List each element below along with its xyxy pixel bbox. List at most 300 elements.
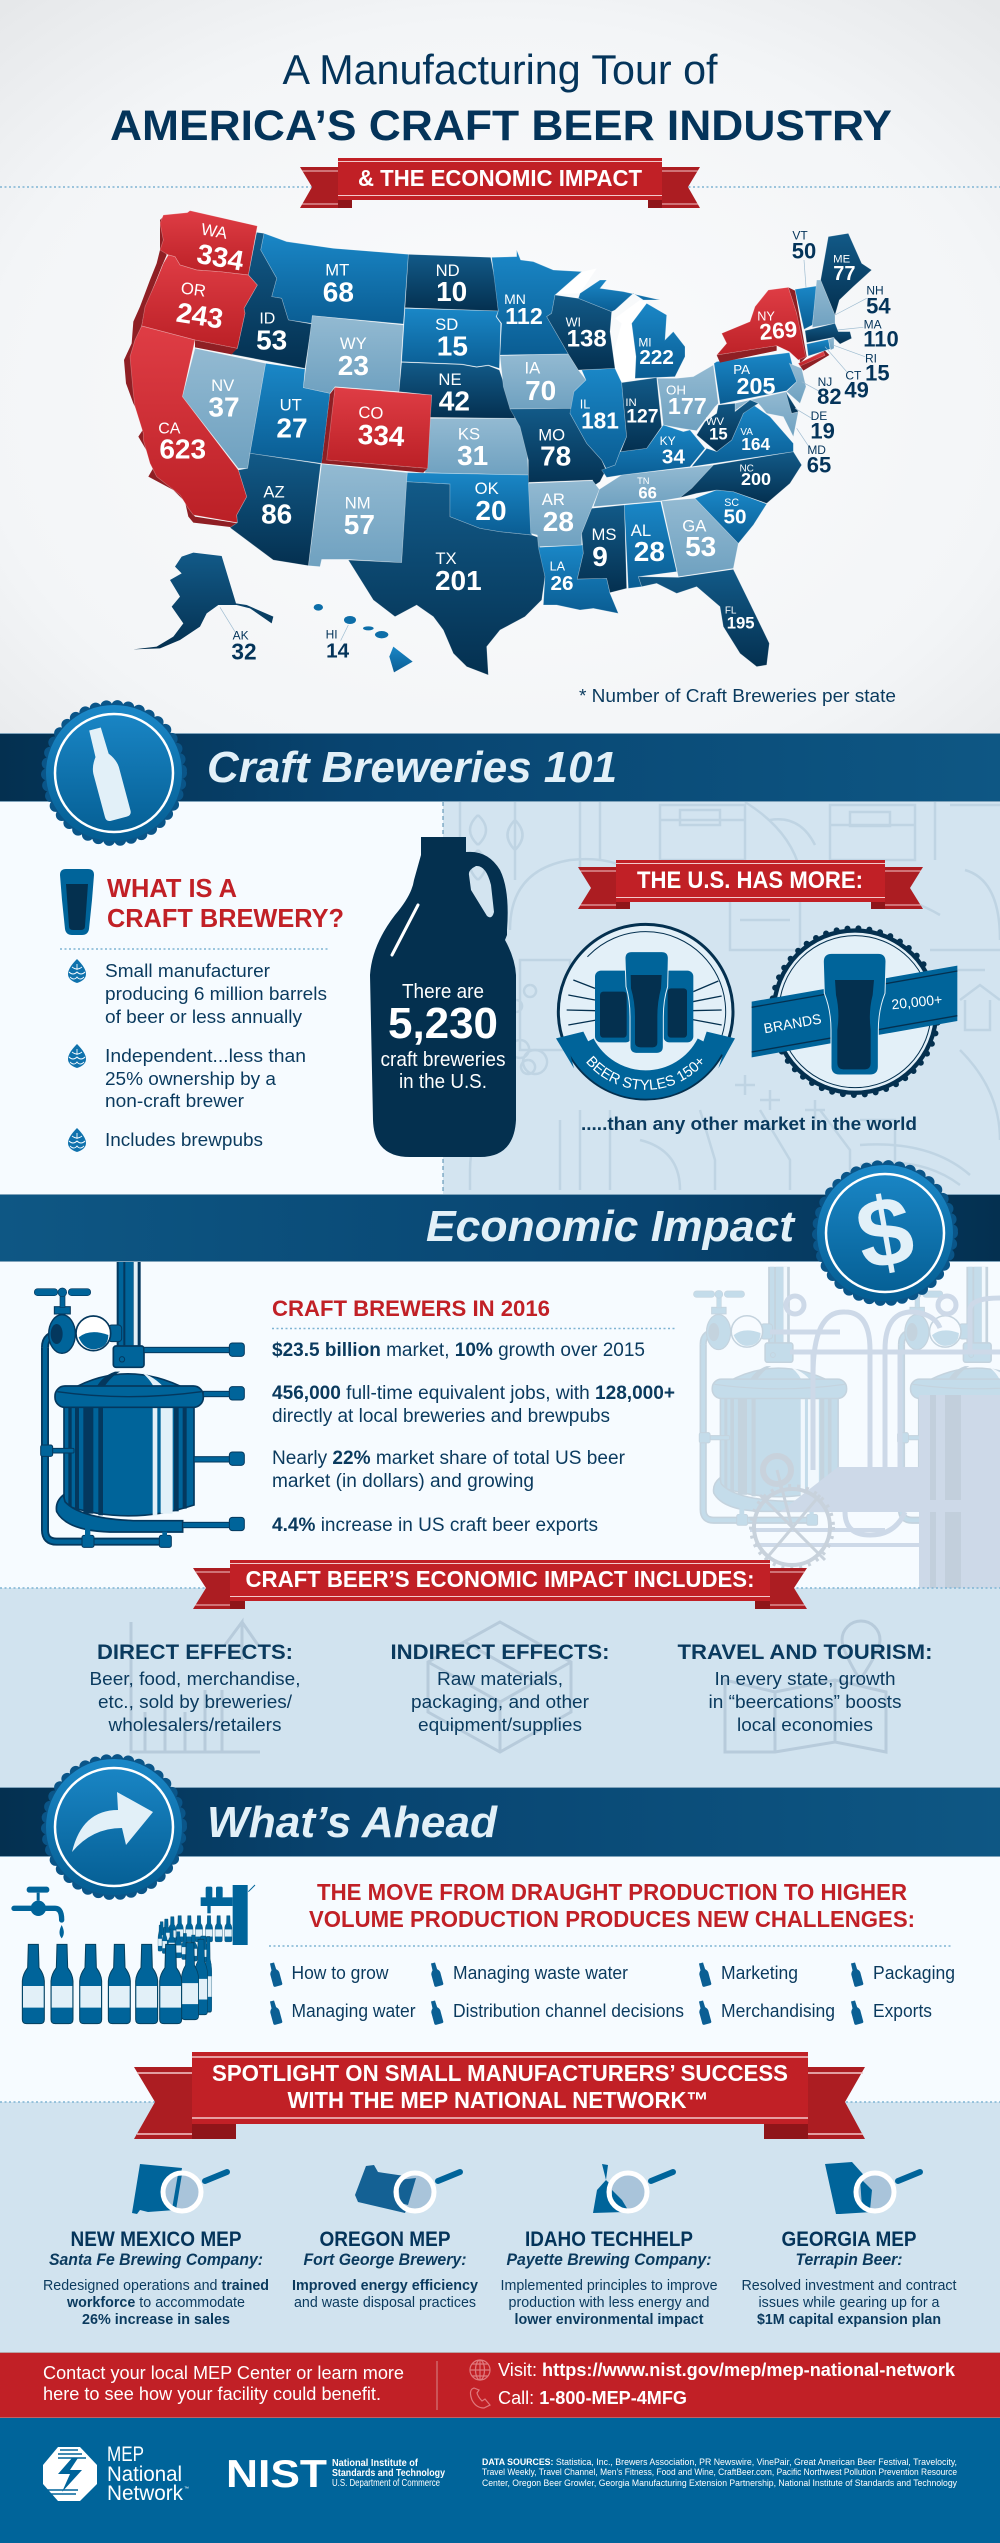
- footer: [0, 2418, 1000, 2543]
- icon: beer glass: [60, 869, 94, 935]
- logo: NIST: U.S. Department of Commerce: [332, 2478, 440, 2489]
- state AZ: [230, 453, 321, 566]
- logo: MEP National Network: National: [107, 2463, 182, 2486]
- state IN: IN: [625, 397, 637, 409]
- state IA: 70: [525, 375, 556, 406]
- fact: jobs: 456,000 full-time equivalent jobs, with 128,000+: [272, 1383, 675, 1404]
- state GA: GA: [682, 517, 707, 536]
- column: travel and tourism: [678, 1641, 932, 1735]
- spotlight: Idaho TechHelp: production with less energy and: [508, 2295, 710, 2311]
- state VT: 50: [792, 239, 816, 264]
- badge: beer styles 150+: [556, 922, 735, 1100]
- west coast 3D edge: [124, 215, 238, 527]
- state RI: [828, 337, 890, 386]
- icon: Idaho magnifier: [593, 2164, 673, 2213]
- challenge items: Merchandising: [721, 2001, 835, 2021]
- state VA: [692, 405, 793, 467]
- column: indirect effects: INDIRECT EFFECTS:: [390, 1641, 610, 1664]
- state MD: MD: [807, 443, 826, 457]
- badge: brands 20,000+: 20,000+: [891, 991, 943, 1012]
- spotlight: Idaho TechHelp: Implemented principles to improve: [500, 2278, 718, 2294]
- state NV: [182, 348, 266, 468]
- fact: exports: 4.4% increase in US craft beer exports: [272, 1515, 598, 1536]
- Great Lakes: [555, 268, 648, 383]
- spotlight: New Mexico MEP: Redesigned operations and trained: [43, 2278, 269, 2294]
- state IL: 181: [581, 407, 619, 433]
- logo: NIST: NIST: [226, 2453, 327, 2496]
- fact: market share: [272, 1448, 626, 1492]
- spotlight: Idaho TechHelp: IDAHO TECHHELP: [525, 2228, 693, 2251]
- state VT: [792, 228, 817, 329]
- state OK: 20: [475, 495, 507, 526]
- state ID: 53: [256, 324, 287, 355]
- heading: what is a craft brewery: [107, 873, 344, 933]
- challenge items: Distribution channel decisions: [453, 2001, 684, 2021]
- state WY: WY: [340, 334, 367, 353]
- state NV: NV: [211, 376, 235, 395]
- state MT: MT: [325, 261, 349, 280]
- spotlight: Oregon MEP: Fort George Brewery:: [304, 2250, 466, 2269]
- state SD: [402, 308, 501, 368]
- state AK: AK: [233, 628, 249, 642]
- state AL: AL: [631, 521, 651, 540]
- heading: what is a craft brewery: WHAT IS A: [107, 873, 237, 903]
- column: direct effects: DIRECT EFFECTS:: [97, 1641, 293, 1664]
- icon: Oregon magnifier: [355, 2165, 460, 2213]
- title: [110, 46, 892, 150]
- state OR: OR: [180, 278, 207, 301]
- spotlight: Oregon MEP: [292, 2165, 478, 2311]
- state ND: [405, 254, 498, 311]
- state SC: SC: [724, 497, 739, 509]
- growler with brewery count: 5,230: [388, 999, 498, 1048]
- state MO: 78: [540, 441, 571, 472]
- spotlight: Idaho TechHelp: Payette Brewing Company:: [506, 2250, 712, 2269]
- state IL: IL: [580, 397, 590, 411]
- state VT: VT: [792, 228, 808, 242]
- state UT: [250, 363, 330, 463]
- challenge items: Managing waste water: [453, 1963, 628, 1983]
- state DE: DE: [811, 409, 827, 423]
- spotlight: Georgia MEP: GEORGIA MEP: [782, 2228, 916, 2251]
- state NH: NH: [866, 283, 884, 297]
- section band: economic impact: [0, 1194, 1000, 1262]
- fact: market: $23.5 billion market, 10% growth over 2015: [272, 1340, 645, 1361]
- state OK: [407, 473, 532, 535]
- state ND: ND: [436, 261, 460, 280]
- badges: beer styles and brands: [556, 922, 958, 1100]
- bullet: small manufacturer: producing 6 million barrels: [105, 984, 327, 1004]
- state LA: [538, 545, 618, 613]
- column: travel and tourism: in “beercations” boosts: [708, 1692, 902, 1712]
- state CO: CO: [358, 403, 384, 423]
- column: indirect effects: Raw materials,: [437, 1669, 563, 1689]
- state MO: [510, 408, 606, 487]
- challenge items: Marketing: [721, 1963, 798, 1983]
- state AZ: AZ: [263, 482, 285, 501]
- heading: move from draught production: [309, 1879, 915, 1932]
- state DE: [786, 392, 835, 443]
- state MD: 65: [807, 453, 831, 478]
- caption: than any other market: .....than any other market in the world: [581, 1114, 917, 1134]
- state HI: 14: [326, 639, 350, 662]
- spotlight: Oregon MEP: Improved energy efficiency: [292, 2278, 478, 2294]
- spotlight: New Mexico MEP: 26% increase in sales: [82, 2312, 230, 2328]
- column: travel and tourism: In every state, growth: [714, 1669, 896, 1689]
- state GA: 53: [685, 531, 716, 562]
- state AL: 28: [634, 536, 665, 567]
- data sources: DATA SOURCES: Statistica, Inc., Brewers Association, PR Newswire, VinePair, Great American Beer Festival, Travelocity,: [482, 2457, 957, 2468]
- title: AMERICA’S CRAFT BEER INDUSTRY: [110, 102, 892, 150]
- state UT: UT: [280, 396, 302, 415]
- growler with brewery count: There are: [402, 981, 484, 1003]
- header background: [0, 0, 1000, 734]
- badge icon: beer bottle: [46, 705, 182, 841]
- faucet: [14, 1887, 64, 1938]
- state WI: WI: [566, 316, 581, 330]
- banner: & the economic impact: [300, 158, 700, 208]
- bullet: independent: 25% ownership by a: [105, 1069, 277, 1089]
- state TX: 201: [435, 565, 482, 596]
- column: direct effects: wholesalers/retailers: [107, 1715, 282, 1735]
- logo: MEP National Network: ™: [184, 2486, 189, 2492]
- state TN: [593, 465, 713, 507]
- data sources: Center, Oregon Beer Growler, Georgia Manufacturing Extension Partnership, National Institute of Standards and Technology: [482, 2478, 957, 2489]
- panel: spotlight: [0, 2102, 1000, 2352]
- state PA: PA: [733, 362, 750, 377]
- badge icon: arrow: [46, 1759, 182, 1895]
- badge: beer styles 150+: BEER STYLES 150+: [586, 1056, 702, 1090]
- logo: NIST: National Institute of: [332, 2457, 418, 2469]
- panel: Craft Breweries 101 left: [0, 802, 443, 1194]
- bottling tap: [201, 1885, 255, 1945]
- bullet: small manufacturer: of beer or less annually: [105, 1007, 302, 1027]
- state MI: 222: [639, 346, 674, 369]
- growler with brewery count: [370, 837, 516, 1157]
- challenge items: [292, 1963, 955, 2021]
- state WY: [303, 316, 403, 393]
- state NM: NM: [345, 493, 371, 512]
- state NH: [812, 280, 891, 327]
- state NE: 42: [439, 386, 470, 417]
- state IN: [621, 378, 662, 452]
- state MS: MS: [592, 525, 616, 544]
- state MA: MA: [864, 317, 882, 331]
- section band: Craft Breweries 101: Craft Breweries 101: [207, 743, 617, 792]
- state OH: [657, 365, 718, 431]
- state MI: MI: [638, 336, 652, 350]
- banner: spotlight: WITH THE MEP NATIONAL NETWORK™: [288, 2087, 708, 2113]
- section band: what's ahead: [0, 1787, 1000, 1857]
- section band: Craft Breweries 101: [0, 733, 1000, 802]
- spotlight: Oregon MEP: OREGON MEP: [320, 2228, 450, 2251]
- state NC: 200: [741, 469, 771, 489]
- contact call to action: here to see how your facility could benefit.: [43, 2384, 381, 2404]
- panel: Craft Breweries 101 right with line pattern: [443, 802, 1000, 1194]
- state NC: NC: [739, 464, 754, 475]
- state RI: RI: [865, 351, 877, 365]
- column: direct effects: Beer, food, merchandise,: [90, 1669, 300, 1689]
- state WV: [697, 400, 758, 452]
- state CA: CA: [158, 420, 181, 437]
- state FL: 195: [727, 613, 755, 632]
- state SC: [695, 490, 767, 543]
- state WV: 15: [709, 424, 728, 443]
- state ME: ME: [833, 253, 851, 265]
- state AK: 32: [231, 638, 257, 664]
- heading: what is a craft brewery: CRAFT BREWERY?: [107, 903, 344, 933]
- bullet icons: small bottles: [268, 1962, 864, 2025]
- state NM: 57: [344, 509, 375, 540]
- state OH: 177: [668, 393, 707, 419]
- state MT: [261, 233, 408, 324]
- fact: market share: market (in dollars) and growing: [272, 1471, 534, 1492]
- state NY: [717, 287, 829, 371]
- state AR: [528, 481, 599, 547]
- state MD: [735, 392, 831, 478]
- state NV: 37: [208, 392, 240, 423]
- spotlight: Georgia MEP: $1M capital expansion plan: [757, 2312, 941, 2328]
- state AR: AR: [542, 490, 565, 509]
- state MN: MN: [504, 291, 526, 307]
- state OH: OH: [666, 382, 686, 397]
- state KY: KY: [660, 434, 676, 448]
- state NE: [399, 362, 515, 418]
- state IL: [570, 368, 627, 468]
- contact strip: [0, 2352, 1000, 2418]
- state KS: [425, 418, 528, 475]
- state MI: [578, 280, 685, 378]
- state TN: TN: [637, 476, 650, 486]
- map footnote: * Number of Craft Breweries per state: [579, 686, 896, 706]
- state AL: [624, 502, 677, 588]
- state KY: 34: [662, 445, 685, 468]
- ghost brewing equipment: [694, 1267, 1000, 1588]
- badge icon: dollar sign: [817, 1165, 953, 1301]
- state WA: 334: [195, 238, 246, 277]
- icon: New Mexico magnifier: [132, 2164, 227, 2214]
- state MA: 110: [863, 327, 899, 352]
- state FL: [638, 569, 769, 667]
- state ND: 10: [436, 276, 467, 307]
- state MN: 112: [505, 303, 543, 329]
- spotlight: Georgia MEP: Terrapin Beer:: [796, 2250, 902, 2269]
- eastern states: [492, 228, 899, 667]
- state WI: [547, 295, 615, 370]
- state TN: 66: [638, 483, 657, 502]
- near bottles: [22, 1937, 212, 2024]
- state DE: 19: [810, 418, 835, 443]
- state VA: VA: [740, 427, 753, 438]
- state UT: 27: [276, 412, 308, 443]
- section band: what's ahead: What’s Ahead: [207, 1798, 498, 1847]
- state KS: 31: [457, 440, 488, 471]
- state CT: [807, 339, 869, 402]
- spotlight: Georgia MEP: Resolved investment and contract: [742, 2278, 956, 2294]
- state NY: NY: [757, 310, 775, 324]
- state IA: IA: [524, 358, 541, 377]
- state IN: 127: [626, 407, 658, 428]
- challenge items: Packaging: [873, 1963, 955, 1983]
- state ID: [230, 232, 312, 368]
- call number: Call: 1-800-MEP-4MFG: [498, 2388, 687, 2408]
- fact: jobs: directly at local breweries and brewpubs: [272, 1406, 610, 1427]
- spotlight: Idaho TechHelp: [500, 2164, 718, 2328]
- western states: [124, 211, 545, 675]
- icon: brewing tank with connectors: [34, 1262, 244, 1547]
- state KS: KS: [458, 424, 480, 443]
- state ME: [821, 233, 872, 315]
- icon: phone: [470, 2388, 490, 2408]
- banner: economic impact includes: CRAFT BEER’S ECONOMIC IMPACT INCLUDES:: [246, 1566, 754, 1592]
- state NY: 269: [758, 316, 798, 345]
- state AZ: 86: [261, 498, 292, 529]
- state ME: 77: [833, 263, 855, 285]
- state KY: [602, 425, 705, 477]
- state NM: [308, 464, 407, 567]
- banner: the US has more: [578, 860, 923, 909]
- panel: economic impact lower: [0, 1588, 1000, 1787]
- bullet: independent: non-craft brewer: [105, 1091, 244, 1111]
- state PA: 205: [737, 373, 775, 399]
- state CT: 49: [844, 377, 869, 402]
- state MS: 9: [592, 541, 608, 572]
- state AK: [133, 553, 273, 664]
- bullet: independent: Independent...less than: [105, 1046, 306, 1066]
- logo: MEP National Network: MEP: [107, 2443, 144, 2466]
- bullet: small manufacturer: [68, 959, 327, 1027]
- spotlight: Georgia MEP: [742, 2162, 956, 2328]
- column: travel and tourism: local economies: [737, 1715, 873, 1735]
- state WA: WA: [200, 220, 230, 243]
- logo: NIST: Standards and Technology: [332, 2467, 445, 2479]
- column: direct effects: etc., sold by breweries/: [98, 1692, 292, 1712]
- heading: move from draught production: VOLUME PRODUCTION PRODUCES NEW CHALLENGES:: [309, 1906, 915, 1932]
- growler with brewery count: craft breweries: [380, 1049, 506, 1071]
- panel: what's ahead: [0, 1857, 1000, 2102]
- state TX: TX: [435, 549, 457, 568]
- challenge items: Exports: [873, 2001, 932, 2021]
- banner: spotlight: [134, 2052, 865, 2139]
- logo: NIST: [226, 2453, 445, 2496]
- state NJ: NJ: [818, 375, 832, 389]
- state FL: FL: [725, 605, 737, 616]
- state IA: [500, 354, 586, 409]
- state MO: MO: [538, 426, 565, 445]
- map of US craft breweries per state: [124, 211, 899, 706]
- state LA: LA: [550, 560, 566, 574]
- icon: globe: [470, 2360, 490, 2380]
- badge: brands 20,000+: BRANDS: [762, 1010, 823, 1036]
- state NH: 54: [866, 293, 891, 318]
- badge icon: dollar sign: $: [848, 1173, 921, 1291]
- bullet: includes brewpubs: [68, 1128, 263, 1152]
- state VA: 164: [741, 434, 770, 454]
- state NJ: [787, 363, 842, 409]
- state WY: 23: [338, 350, 369, 381]
- state CA: 623: [159, 433, 206, 464]
- icon: Georgia magnifier: [825, 2162, 920, 2214]
- challenge items: How to grow: [292, 1963, 389, 1983]
- contact call to action: [43, 2363, 404, 2404]
- column: indirect effects: packaging, and other: [411, 1692, 589, 1712]
- heading: craft brewers in 2016: CRAFT BREWERS IN 2016: [272, 1296, 550, 1321]
- contact call to action: Contact your local MEP Center or learn more: [43, 2363, 404, 2383]
- spotlight: New Mexico MEP: NEW MEXICO MEP: [70, 2228, 242, 2251]
- state OK: OK: [475, 479, 499, 498]
- challenge items: Managing water: [292, 2001, 416, 2021]
- state SC: 50: [724, 505, 746, 528]
- state CO: 334: [357, 419, 406, 452]
- data sources: [482, 2457, 957, 2489]
- state PA: [714, 353, 797, 404]
- state LA: 26: [551, 572, 573, 595]
- distant bottles: [158, 1916, 232, 1962]
- column: travel and tourism: TRAVEL AND TOURISM:: [678, 1641, 932, 1664]
- icon: bottling line: [14, 1885, 255, 2024]
- faint icons behind effects: [131, 1621, 886, 1752]
- state NE: NE: [438, 370, 462, 389]
- banner: spotlight: SPOTLIGHT ON SMALL MANUFACTURERS’ SUCCESS: [212, 2060, 788, 2086]
- column: direct effects: [90, 1641, 300, 1735]
- banner: the US has more: THE U.S. HAS MORE:: [637, 867, 863, 894]
- state WV: WV: [706, 416, 725, 428]
- state ID: ID: [259, 310, 275, 327]
- growler with brewery count: in the U.S.: [399, 1071, 487, 1093]
- bullet: small manufacturer: Small manufacturer: [105, 961, 270, 981]
- state GA: [662, 498, 738, 577]
- banner: & the economic impact: & THE ECONOMIC IMPACT: [358, 165, 642, 191]
- visit link: Visit: https://www.nist.gov/mep/mep-national-network: [498, 2360, 956, 2380]
- badge: brands 20,000+: [752, 928, 957, 1095]
- title: A Manufacturing Tour of: [282, 46, 718, 93]
- state HI: [314, 604, 413, 672]
- banner: economic impact includes: [193, 1560, 807, 1609]
- heading: move from draught production: THE MOVE FROM DRAUGHT PRODUCTION TO HIGHER: [317, 1879, 907, 1905]
- state HI: HI: [326, 627, 338, 641]
- spotlight: Georgia MEP: issues while gearing up for a: [758, 2295, 940, 2311]
- state MS: [577, 505, 627, 593]
- state NC: [680, 452, 802, 503]
- logo: MEP National Network: Network: [107, 2482, 183, 2505]
- state RI: 15: [865, 361, 890, 386]
- column: indirect effects: [390, 1641, 610, 1735]
- bullet: independent: [68, 1044, 306, 1111]
- state MT: 68: [323, 277, 354, 308]
- state MN: [492, 250, 582, 355]
- state WA: [160, 211, 257, 277]
- state CO: [322, 387, 432, 473]
- spotlight: New Mexico MEP: Santa Fe Brewing Company:: [49, 2250, 263, 2269]
- state CA: [130, 326, 247, 523]
- state OR: 243: [174, 297, 225, 335]
- column: indirect effects: equipment/supplies: [418, 1715, 582, 1735]
- fact: jobs: [272, 1383, 675, 1427]
- state AR: 28: [543, 506, 574, 537]
- state WI: 138: [567, 326, 607, 353]
- challenges list: [268, 1962, 955, 2025]
- state SD: 15: [437, 331, 468, 362]
- state NJ: 82: [817, 384, 842, 409]
- state CT: CT: [845, 368, 862, 382]
- state OR: [142, 255, 257, 354]
- state MA: [805, 317, 899, 352]
- spotlight: Oregon MEP: and waste disposal practices: [294, 2295, 476, 2311]
- spotlight: Idaho TechHelp: lower environmental impact: [514, 2312, 704, 2328]
- spotlight: New Mexico MEP: [43, 2164, 269, 2328]
- state TX: [348, 482, 545, 675]
- section band: economic impact: Economic Impact: [426, 1202, 796, 1251]
